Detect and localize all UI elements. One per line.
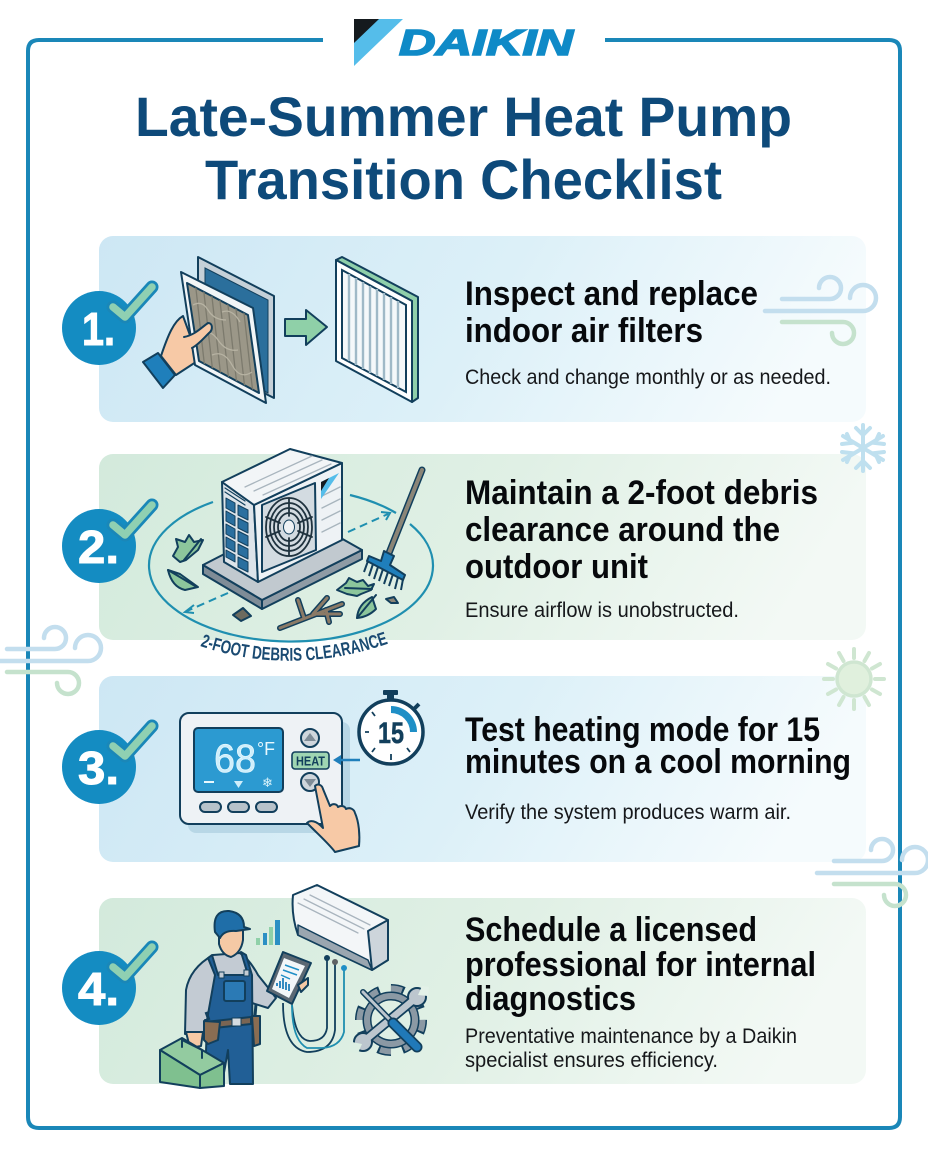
icon: thermostat: °F [257,739,275,759]
outdoor unit [222,449,342,582]
icon: dirty filter being removed by hand [143,257,274,403]
icon: snowflake [842,425,884,471]
cables [283,958,344,1052]
heat button [292,752,329,769]
icon: sun [824,649,884,709]
toolbox and hand [186,1032,203,1048]
icon: gear with tools [350,986,429,1053]
concrete pad [203,515,362,609]
heading 4: Schedule a licensed [465,911,757,949]
title: Transition Checklist [205,148,722,211]
description 3: Verify the system produces warm air. [465,801,791,824]
decorative wind top right [765,277,876,344]
heading 2: outdoor unit [465,548,648,586]
icon: thermostat: 68 [214,737,256,781]
badge 3 with check: 3. [78,742,119,794]
badge 4 with check [62,947,152,1025]
panel 4: professional [62,885,866,1088]
panel 2 background [99,454,866,640]
heading 4: diagnostics [465,980,636,1018]
leaves and branch [168,535,398,621]
overalls [205,952,253,1084]
decorative wind left [0,627,101,694]
panel 1: air filters [62,236,866,422]
icon: stopwatch 15 [359,690,423,764]
description 1: Check and change monthly or as needed. [465,366,831,389]
panel 3: test heating [62,676,866,862]
description 4 [465,1025,797,1072]
icon: stopwatch 15: 15 [378,717,404,750]
clearance ring [149,495,433,642]
badge 1 with check [62,287,152,365]
heading 2: clearance around the [465,511,780,549]
head [219,929,243,957]
heading 3: Test heating mode for 15 [465,711,820,749]
heading 1: indoor air filters [465,312,703,350]
logo: Daikin [354,19,574,66]
illustration: outdoor unit with clearance ring [149,449,433,642]
heading 3: minutes on a cool morning [465,743,851,781]
badge 2 with check: 2. [78,521,119,573]
panel 1 background [99,236,866,422]
rake [364,470,422,590]
icon: thermostat [180,713,359,852]
signal bars [256,938,260,945]
hand pressing button [307,785,359,852]
icon: indoor AC unit [293,885,388,970]
heading 1 [465,275,758,350]
badge 3 with check [62,726,152,804]
logo: Daikin: DAIKIN [399,22,574,63]
badge 1 with check: 1. [82,303,115,355]
tool belt [205,1017,251,1029]
panel 4 background [99,898,866,1084]
arrow to heat button [333,755,360,765]
decorative wind bottom right [817,839,928,906]
panel 3 background [99,676,866,862]
heading 3 [465,711,851,781]
icon: thermostat: ❄ [262,775,273,790]
heading 2 [465,474,818,586]
description 2: Ensure airflow is unobstructed. [465,599,739,622]
title [135,85,792,211]
mini logo on unit [321,473,339,499]
description 4: specialist ensures efficiency. [465,1049,718,1072]
tablet [267,952,311,1004]
illustration: technician [160,911,347,1088]
heading 1: Inspect and replace [465,275,758,313]
left grille [226,498,248,572]
icon: thermostat: HEAT [296,754,325,768]
description 4: Preventative maintenance by a Daikin [465,1025,797,1048]
heading 2: Maintain a 2-foot debris [465,474,818,512]
clearance label: 2-FOOT DEBRIS CLEARANCE [200,632,388,661]
icon: arrow to new filter [285,310,327,345]
badge 2 with check [62,505,152,583]
shirt [185,953,276,1034]
heading 4 [465,911,816,1018]
clearance arrows [185,512,390,613]
panel 2: debris clearance [62,448,866,661]
icon: clean filter [336,257,418,402]
heading 4: professional for internal [465,946,816,984]
badge 4 with check: 4. [78,963,119,1015]
title: Late-Summer Heat Pump [135,85,792,148]
